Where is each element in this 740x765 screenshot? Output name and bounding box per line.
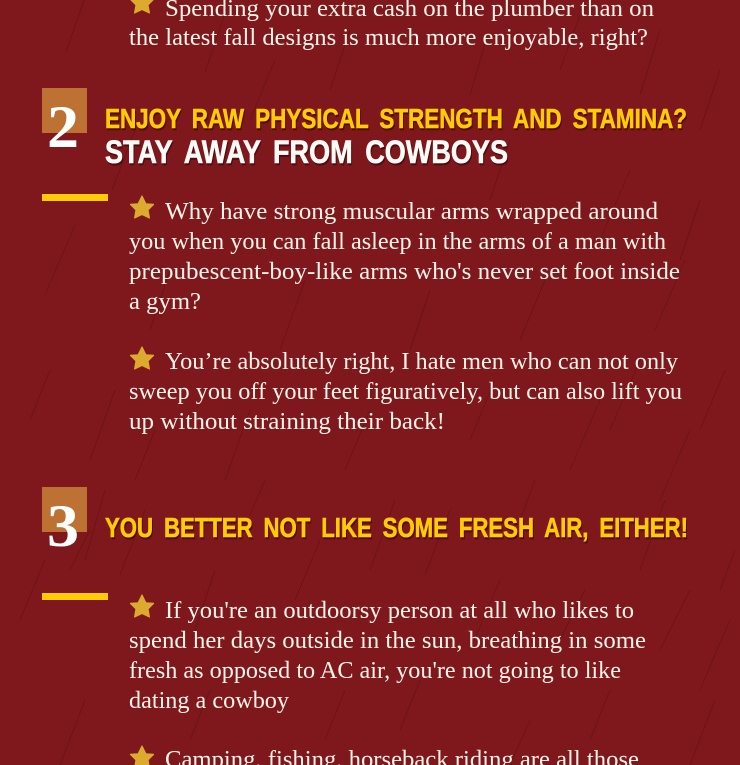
text block: strong arms: you when you can fall asleep in the arms of a man with [129, 229, 666, 255]
number badge 2: 2 [47, 94, 79, 160]
text block: outdoorsy: spend her days outside in the sun, breathing in some [129, 628, 646, 654]
icon: star [130, 196, 154, 218]
section 2 header [42, 88, 688, 201]
text block: outdoorsy [129, 598, 646, 714]
text block: section 1 ending: the latest fall designs is much more enjoyable, right? [129, 25, 648, 51]
number badge 2 [42, 88, 87, 160]
icon: star [130, 0, 154, 13]
icon: star [130, 595, 154, 617]
text block: outdoorsy: If you're an outdoorsy person at all who likes to [165, 598, 634, 624]
text block: strong arms: Why have strong muscular arms wrapped around [165, 199, 658, 225]
text block: lift you up: up without straining their back! [129, 409, 445, 435]
icon: star [130, 347, 154, 369]
section 3 header [42, 487, 689, 600]
section 1 closing text [129, 0, 654, 51]
text block: lift you up [129, 349, 682, 435]
accent bar [42, 194, 108, 201]
text block: strong arms: a gym? [129, 289, 201, 315]
icon: star [130, 746, 154, 765]
number badge 3: 3 [47, 493, 79, 559]
text block: lift you up: You’re absolutely right, I hate men who can not only [165, 349, 678, 375]
section 3 body [129, 595, 646, 765]
heading: section 2 [105, 103, 688, 172]
heading: section 2: STAY AWAY FROM COWBOYS [106, 136, 509, 172]
number badge 3 [42, 487, 87, 559]
text block: section 1 ending [129, 0, 654, 51]
text block: outdoorsy: fresh as opposed to AC air, you're not going to like [129, 658, 621, 684]
heading: section 2: STAY AWAY FROM COWBOYS [105, 134, 508, 170]
text block: strong arms [129, 199, 680, 315]
text block: lift you up: sweep you off your feet figuratively, but can also lift you [129, 379, 682, 405]
accent bar [42, 593, 108, 600]
text block: outdoorsy: dating a cowboy [129, 688, 289, 714]
text block: strong arms: prepubescent-boy-like arms who's never set foot inside [129, 259, 680, 285]
section 2 body [129, 196, 682, 435]
